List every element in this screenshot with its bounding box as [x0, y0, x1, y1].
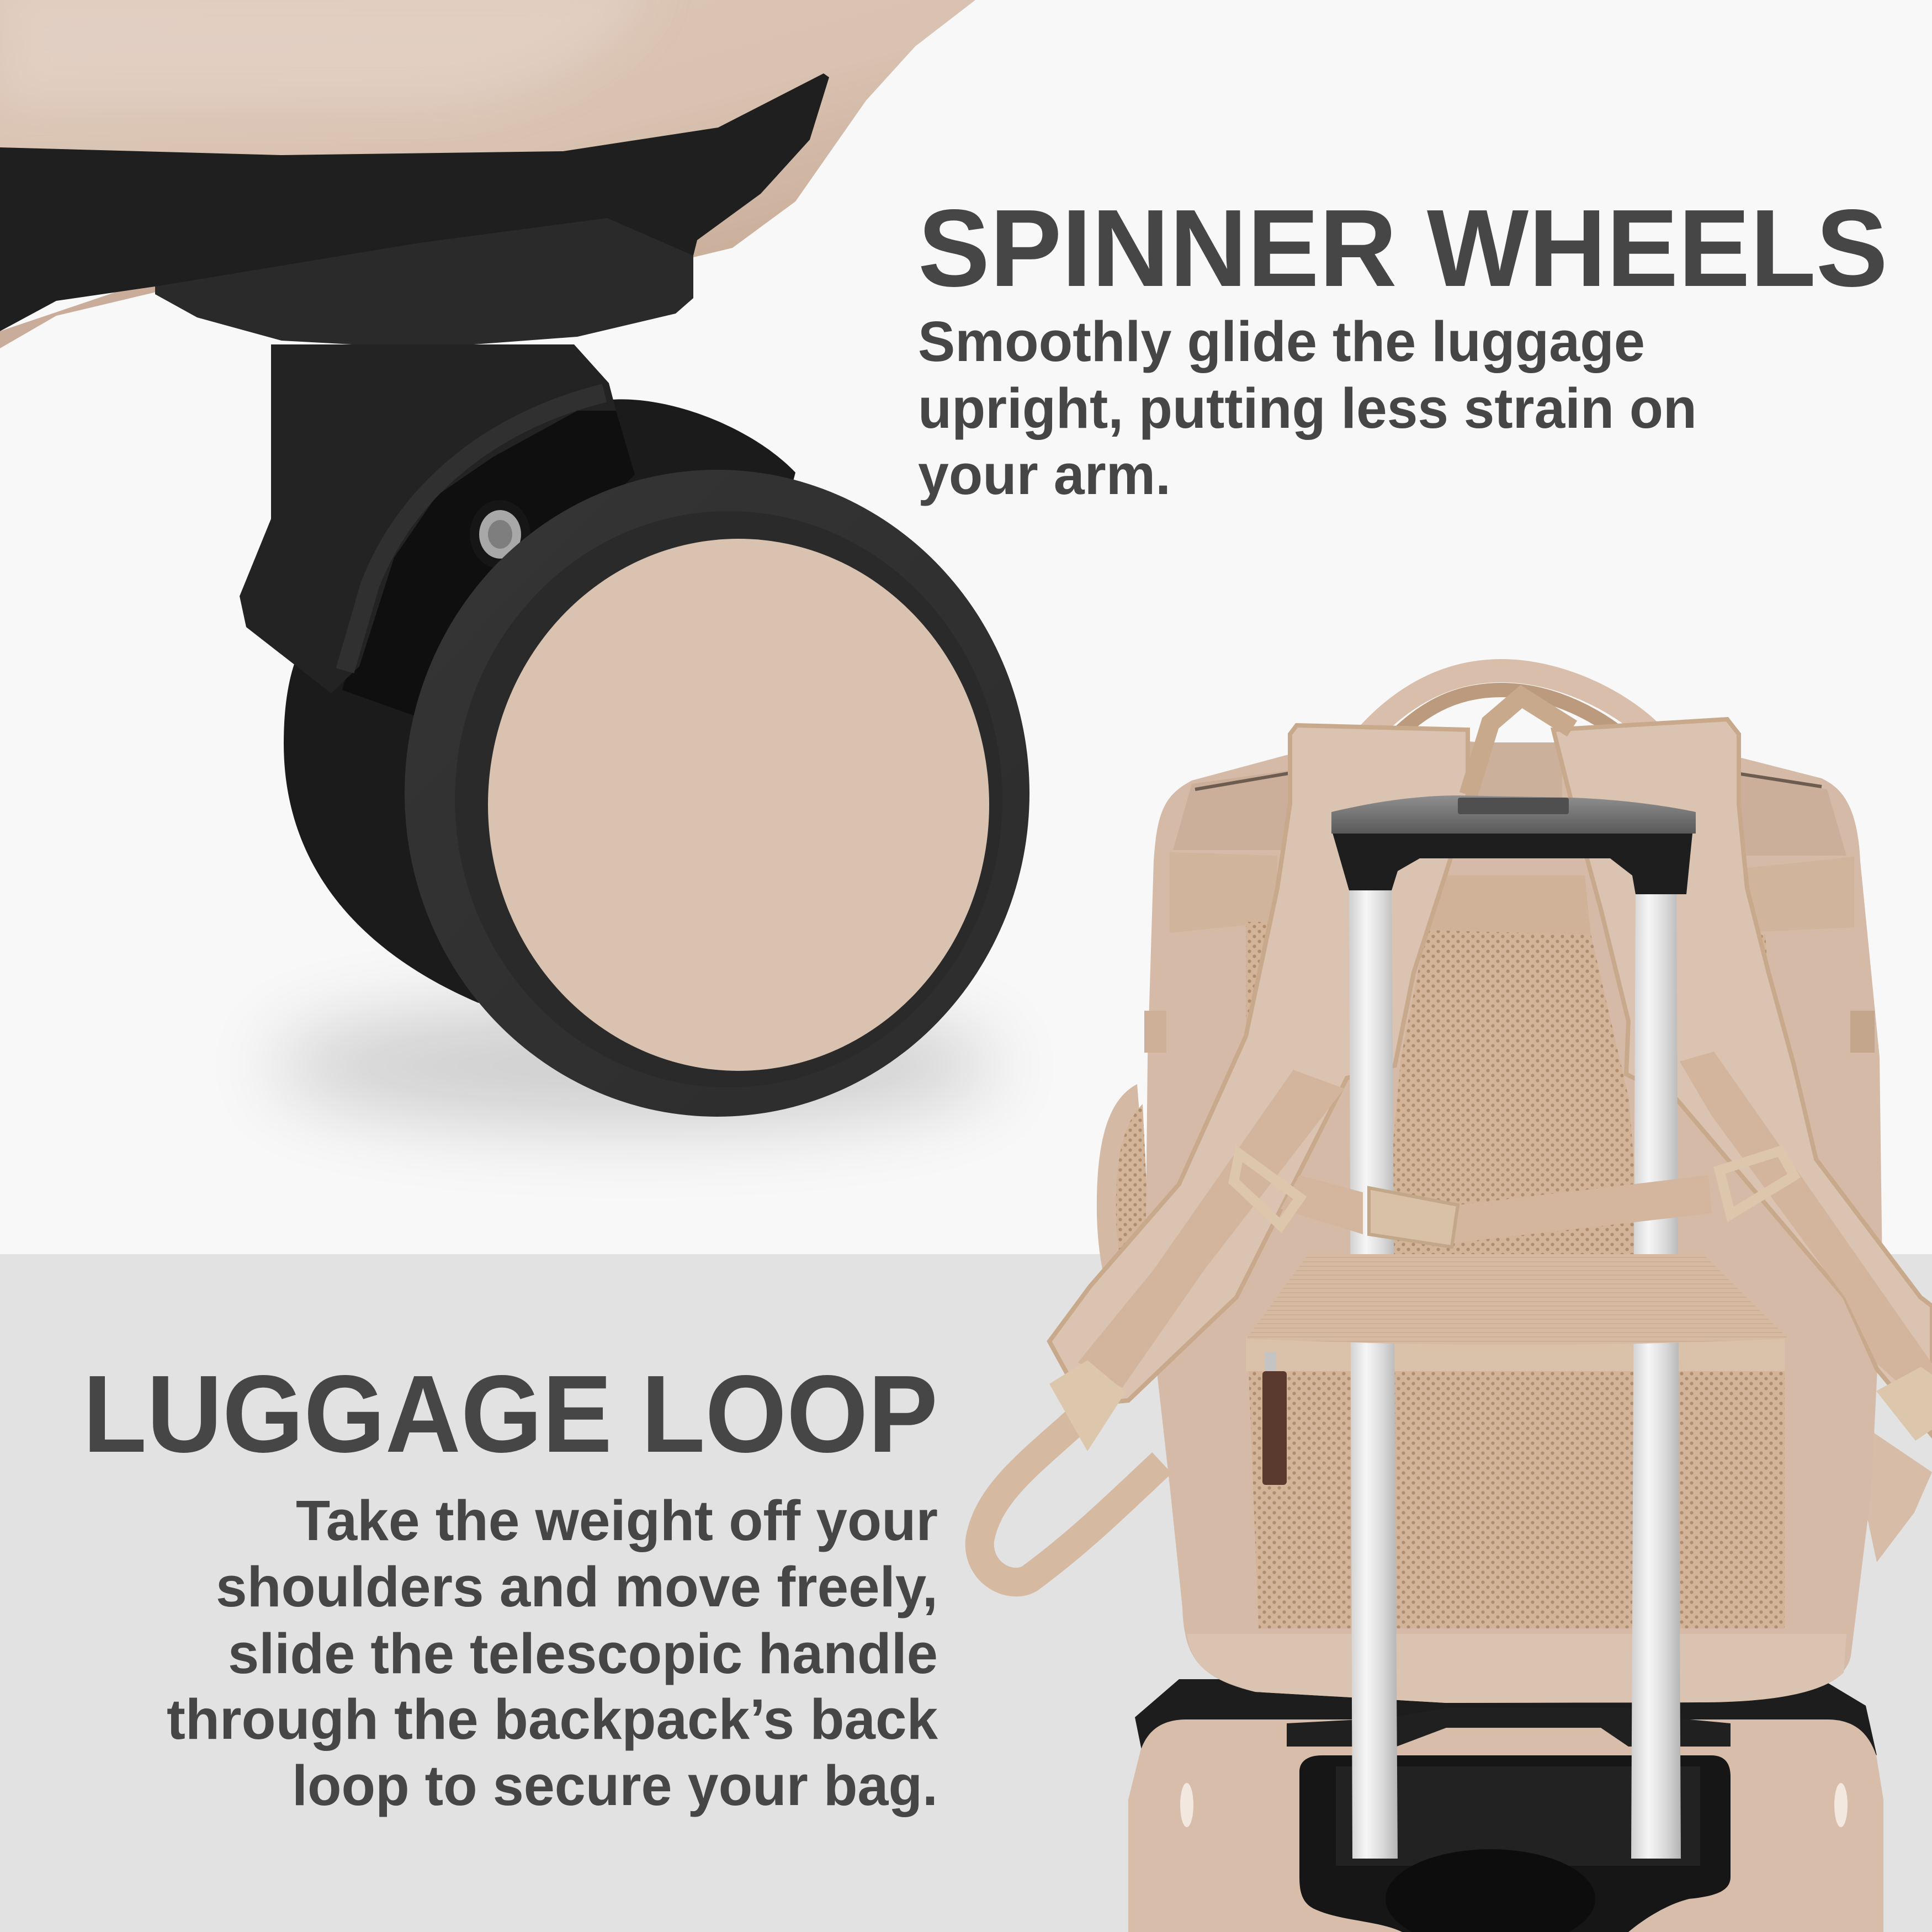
left side webbing [1170, 852, 1277, 933]
right panel seam [1733, 773, 1822, 787]
left strap webbing [1078, 1070, 1344, 1388]
right upper panel shade [1733, 773, 1846, 856]
right lower wing [1845, 1413, 1932, 1562]
suitcase shell front [1128, 1719, 1883, 1932]
shade between shoulder straps [1457, 742, 1562, 800]
swivel stem and arm [240, 344, 616, 693]
zipper pull [1262, 1352, 1287, 1485]
center back mesh [1382, 930, 1636, 1259]
left side tab [1144, 1011, 1166, 1053]
right strap slider [1719, 1151, 1794, 1214]
left upper panel shade [1173, 770, 1292, 850]
lower grey panel [0, 1254, 1932, 1932]
swivel base plate [0, 73, 829, 331]
right lower buckle [1876, 1367, 1932, 1441]
zipper band [1135, 1679, 1877, 1755]
right side tab [1850, 1011, 1875, 1053]
body bottom panel [1187, 1634, 1846, 1703]
luggage loop description: Take the weight off your [296, 1489, 938, 1552]
release button [1458, 798, 1569, 814]
spinner wheels description: Smoothly glide the luggage [918, 310, 1645, 373]
wheel photo: suitcase corner and spinner wheel [0, 0, 1029, 1126]
beige hub cap [488, 539, 989, 1071]
left panel seam [1195, 773, 1292, 789]
left padded shoulder strap [1049, 725, 1468, 1405]
spinner wheels description: your arm. [918, 443, 1171, 506]
spinner wheels description [918, 310, 1697, 506]
rear wheel [284, 399, 795, 1003]
lower mesh pocket [1249, 1371, 1785, 1628]
fork interior [342, 411, 635, 718]
hanging webbing loop [980, 1413, 1162, 1582]
telescopic tube left [1349, 889, 1398, 1859]
shell highlights [1180, 1783, 1848, 1827]
sternum buckle [1369, 1188, 1458, 1247]
suitcase shell [0, 0, 975, 348]
handle recess [1299, 1755, 1731, 1932]
spinner wheels description: upright, putting less strain on [918, 376, 1697, 440]
carry-on suitcase [1128, 1679, 1883, 1932]
luggage loop band [1246, 1254, 1788, 1345]
arm highlight [345, 393, 604, 671]
spinner wheels heading: SPINNER WHEELS [918, 187, 1888, 310]
wheel ground shadow [270, 1005, 999, 1126]
right strap webbing [1680, 1052, 1932, 1413]
top carry handle [1287, 1708, 1731, 1747]
swivel flange [155, 218, 693, 348]
grip top [1331, 795, 1696, 834]
luggage loop description: slide the telescopic handle [228, 1622, 938, 1685]
luggage loop description: shoulders and move freely, [216, 1555, 938, 1618]
luggage loop description: loop to secure your bag. [292, 1754, 938, 1817]
sternum strap [1281, 1175, 1712, 1243]
right side mesh [1737, 935, 1772, 1038]
left lower buckle [1049, 1360, 1126, 1451]
luggage loop description [167, 1489, 938, 1817]
pocket zipper band [1246, 1337, 1785, 1371]
axle bolt [470, 500, 530, 569]
luggage loop heading: LUGGAGE LOOP [83, 1353, 938, 1475]
telescopic tube right [1631, 889, 1681, 1859]
left side mesh [1246, 922, 1275, 1038]
small grab loop [1468, 697, 1572, 795]
tire inner ring [455, 511, 1002, 1087]
center webbing [1426, 875, 1591, 935]
right side webbing [1734, 857, 1854, 933]
side pocket [1097, 1084, 1159, 1367]
backpack [980, 671, 1932, 1859]
top grab handle [1361, 671, 1653, 756]
trolley handle grip [1331, 795, 1696, 894]
front tire [405, 470, 1029, 1117]
left strap slider [1234, 1154, 1300, 1225]
thumb scoop [1386, 1849, 1595, 1932]
main body [1145, 740, 1882, 1703]
luggage loop description: through the backpack’s back [167, 1687, 938, 1751]
right padded shoulder strap [1553, 719, 1932, 1435]
recess inner panel [1336, 1766, 1700, 1866]
